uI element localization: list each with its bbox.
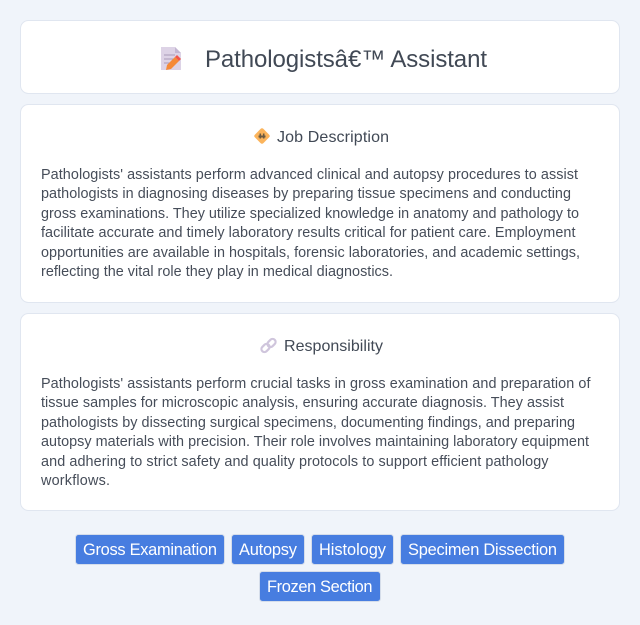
panel: job description (20, 104, 620, 302)
tag: frozen section: Frozen Section (267, 578, 372, 596)
text: job description body: gross examinations. They utilize specialized knowledge in anatomy and pathology to (41, 206, 579, 222)
heading: job description: Job Description (277, 129, 389, 146)
text: responsibility body: Pathologists' assistants perform crucial tasks in gross examination and preparation of (41, 376, 592, 392)
tag: autopsy: Autopsy (239, 541, 298, 559)
text: job description body: facilitate accurate and timely laboratory results critical for patient care. Employment (41, 225, 576, 241)
text: responsibility body (40, 376, 592, 489)
icon: diamond sign (254, 128, 270, 144)
panel: responsibility (20, 314, 620, 510)
panel: title card (20, 20, 620, 94)
tag: gross examination (76, 534, 224, 564)
tag: specimen dissection: Specimen Dissection (408, 541, 557, 559)
text: responsibility body: tissue samples for microscopic analysis, ensuring accurate diagnosis. They assist (41, 395, 564, 411)
text: job description body: Pathologists' assistants perform advanced clinical and autopsy procedures to assist (41, 167, 578, 183)
tag: specimen dissection (400, 534, 564, 564)
tag: histology (312, 534, 394, 564)
text: job description body: pathologists in diagnosing diseases by preparing tissue specimens and conducting (41, 186, 571, 202)
tag: frozen section (260, 572, 380, 602)
text: responsibility body: autopsy materials with precision. Their role involves maintaining laboratory equipment (41, 434, 589, 450)
title: Pathologistsâ€™ Assistant (205, 46, 487, 73)
tag: autopsy (232, 534, 304, 564)
heading: responsibility: Responsibility (284, 338, 383, 355)
tags (76, 534, 564, 602)
text: responsibility body: pathologists by dissecting surgical specimens, documenting findings, and preparing (41, 415, 575, 431)
text: job description body: reflecting the vital role they play in medical diagnostics. (41, 264, 393, 280)
text: responsibility body: and adhering to strict safety and quality protocols to support efficient pathology (41, 454, 549, 470)
text: job description body: opportunities are available in hospitals, forensic laboratories, and academic settings, (41, 245, 580, 261)
text: job description body (41, 167, 580, 280)
text: responsibility body: workflows. (40, 473, 110, 489)
icon: memo with pencil (161, 47, 181, 70)
icon: link (260, 338, 277, 353)
tag: histology: Histology (319, 541, 387, 559)
tag: gross examination: Gross Examination (83, 541, 217, 559)
